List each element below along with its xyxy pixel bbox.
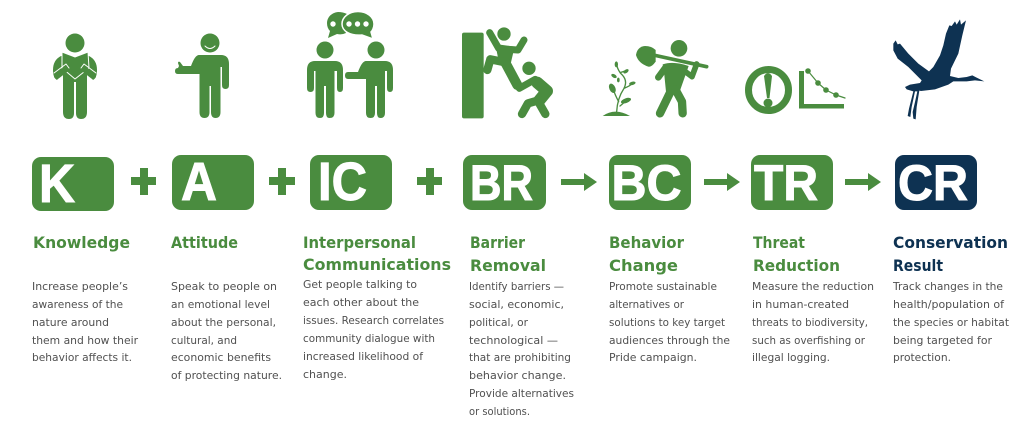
- badge: A: [172, 152, 254, 212]
- text block: conservation description: health/population of: [893, 298, 1005, 311]
- text block: behavior description: alternatives or: [609, 298, 684, 311]
- text block: barrier description: technological —: [469, 334, 558, 347]
- badge: TR: TR: [754, 155, 818, 211]
- text block: conservation description: being targeted for: [893, 334, 992, 347]
- icon: exclamation warning circle: [748, 70, 788, 110]
- text block: barrier description: [469, 280, 574, 418]
- text block: interpersonal description: community dialogue with: [303, 332, 435, 345]
- text block: barrier description: that are prohibiting: [469, 351, 571, 364]
- panel: knowledge: [32, 34, 138, 364]
- text block: threat description: Measure the reduction: [752, 280, 874, 293]
- heading: Barrier Removal: Barrier: [470, 233, 525, 252]
- heading: Behavior Change: Behavior: [609, 233, 684, 252]
- heading: Threat Reduction: Threat: [753, 233, 805, 252]
- heading: Conservation Result: Result: [893, 256, 943, 275]
- text block: attitude description: cultural, and: [171, 334, 237, 347]
- text block: threat description: such as overfishing or: [752, 334, 865, 347]
- text block: knowledge description: them and how their: [32, 334, 138, 347]
- heading: Conservation Result: [893, 233, 1008, 275]
- text block: attitude description: economic benefits: [171, 351, 271, 364]
- text block: interpersonal description: [303, 278, 444, 381]
- text block: behavior description: Promote sustainable: [609, 280, 717, 293]
- badge: K: [32, 154, 114, 214]
- badge: A: A: [181, 152, 217, 212]
- text block: knowledge description: Increase people’s: [32, 280, 128, 293]
- text block: interpersonal description: each other about the: [303, 296, 419, 309]
- text block: attitude description: [171, 280, 282, 382]
- text block: barrier description: Provide alternatives: [469, 387, 574, 400]
- text block: behavior description: solutions to key target: [609, 316, 726, 329]
- panel: behavior change: [603, 40, 730, 364]
- arrow 1: [561, 173, 597, 191]
- heading: Behavior Change: [609, 233, 684, 275]
- arrow 3: [845, 173, 881, 191]
- text block: barrier description: Identify barriers —: [469, 280, 564, 293]
- heading: Interpersonal Communications: Interpersonal: [303, 233, 416, 252]
- panel: interpersonal communications: [303, 12, 451, 381]
- text block: threat description: threats to biodiversity,: [752, 316, 868, 329]
- text block: behavior description: [609, 280, 730, 364]
- text block: attitude description: about the personal,: [171, 316, 276, 329]
- text block: behavior description: Pride campaign.: [609, 351, 697, 364]
- text block: knowledge description: awareness of the: [32, 298, 123, 311]
- text block: interpersonal description: increased likelihood of: [303, 350, 424, 363]
- icon: declining threat line chart: [799, 68, 845, 108]
- icon: person carrying a shovel: [636, 40, 707, 113]
- plus sign 1: [131, 168, 156, 195]
- text block: interpersonal description: change.: [303, 368, 347, 381]
- text block: threat description: illegal logging.: [752, 351, 830, 364]
- text block: conservation description: Track changes in the: [892, 280, 1003, 293]
- badge: BC: BC: [612, 155, 682, 211]
- text block: conservation description: [892, 280, 1010, 364]
- icon: person reading a book: [53, 34, 97, 119]
- badge: K: K: [39, 154, 75, 214]
- text block: conservation description: protection.: [893, 351, 951, 364]
- heading: Conservation Result: Conservation: [893, 233, 1008, 252]
- heading: Behavior Change: Change: [609, 256, 678, 275]
- badge: IC: [310, 152, 392, 212]
- text block: knowledge description: behavior affects it.: [32, 351, 132, 364]
- text block: behavior description: audiences through the: [609, 334, 730, 347]
- panel: attitude: [171, 34, 282, 382]
- icon: two people talking with speech bubbles: [307, 12, 393, 118]
- panel: barrier removal: [462, 27, 574, 418]
- badge: BR: BR: [470, 155, 533, 211]
- text block: attitude description: an emotional level: [171, 298, 270, 311]
- plus sign 3: [417, 168, 442, 195]
- text block: barrier description: behavior change.: [469, 369, 566, 382]
- text block: interpersonal description: issues. Research correlates: [303, 314, 444, 327]
- panel: threat reduction: [748, 68, 874, 364]
- panel: conservation result: [892, 19, 1010, 364]
- heading: Knowledge: Knowledge: [33, 233, 130, 252]
- heading: Interpersonal Communications: Communications: [303, 255, 451, 274]
- text block: barrier description: or solutions.: [469, 405, 530, 418]
- badge: IC: IC: [318, 152, 367, 212]
- text block: threat description: in human-created: [752, 298, 849, 311]
- heading: Interpersonal Communications: [303, 233, 451, 274]
- icon: smiling person gesturing: [175, 34, 229, 118]
- text block: knowledge description: nature around: [32, 316, 109, 329]
- arrow 2: [704, 173, 740, 191]
- icon: people climbing over a wall: [462, 27, 547, 118]
- heading: Threat Reduction: Reduction: [753, 256, 840, 275]
- text block: attitude description: of protecting nature.: [171, 369, 282, 382]
- heading: Barrier Removal: Removal: [470, 256, 546, 275]
- text block: barrier description: social, economic,: [469, 298, 564, 311]
- text block: knowledge description: [32, 280, 138, 364]
- plus sign 2: [269, 168, 295, 195]
- icon: plant seedling: [603, 61, 636, 116]
- badge: CR: CR: [898, 155, 968, 211]
- heading: Threat Reduction: [753, 233, 840, 275]
- heading: Barrier Removal: [470, 233, 546, 275]
- text block: conservation description: the species or habitat: [893, 316, 1010, 329]
- text block: attitude description: Speak to people on: [171, 280, 277, 293]
- heading: Attitude: Attitude: [171, 233, 238, 252]
- text block: barrier description: political, or: [469, 316, 528, 329]
- text block: interpersonal description: Get people talking to: [303, 278, 417, 291]
- icon: crane in flight: [893, 19, 984, 119]
- text block: threat description: [752, 280, 874, 364]
